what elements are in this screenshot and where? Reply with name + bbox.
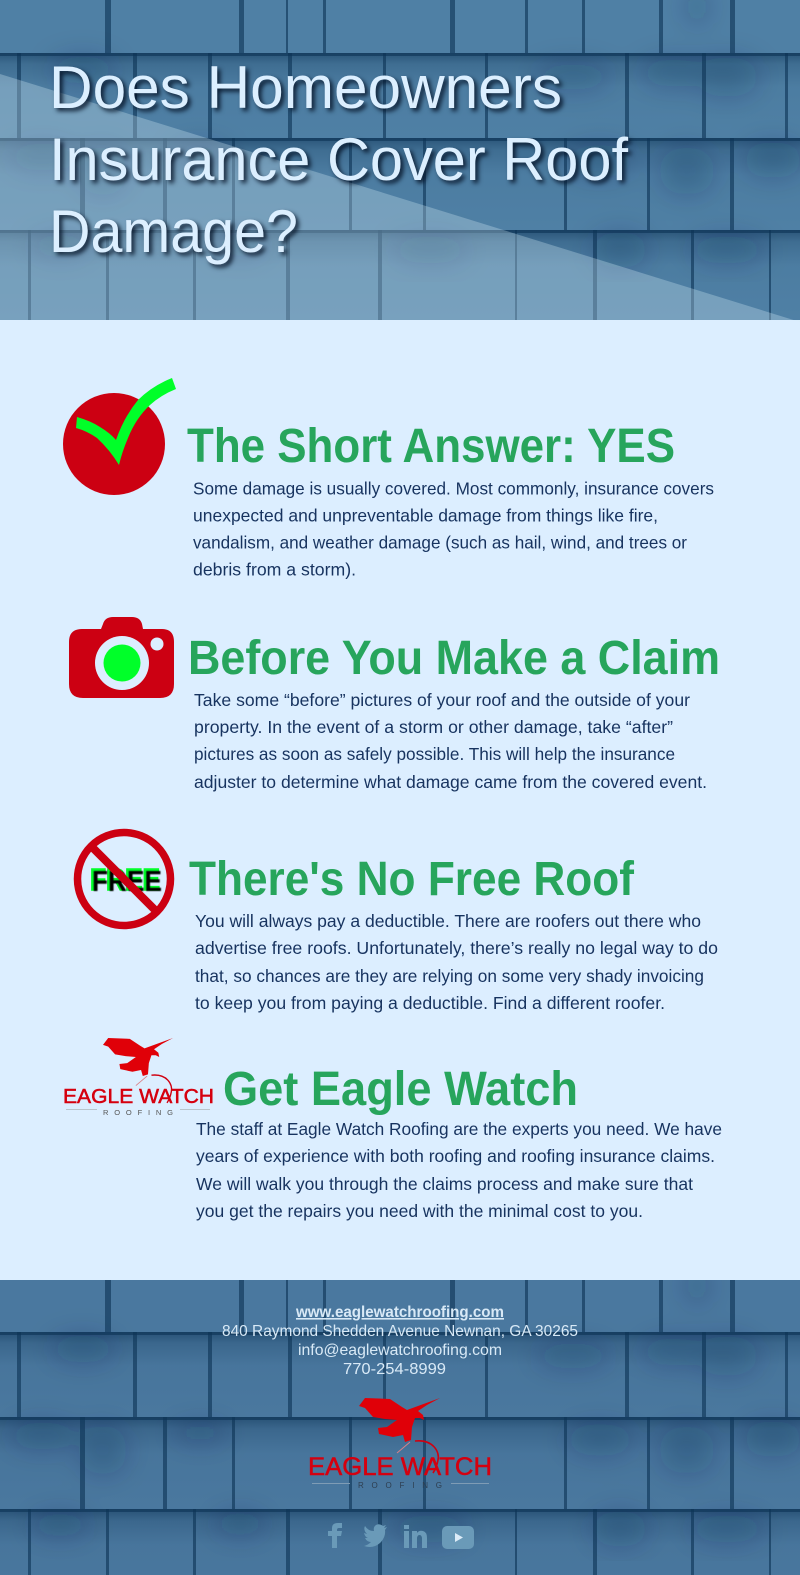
icon: linkedin xyxy=(404,1525,427,1548)
title: Damage? xyxy=(49,198,298,265)
body text: You will always pay a deductible. There are roofers out there who xyxy=(195,911,701,931)
title xyxy=(49,54,628,265)
icon: no free sign: FREE xyxy=(92,866,162,898)
contact details: 840 Raymond Shedden Avenue Newnan, GA 30265 xyxy=(222,1323,578,1340)
logo: eagle watch footer xyxy=(308,1398,492,1490)
icon: no free sign xyxy=(78,832,170,926)
body text: years of experience with both roofing and roofing insurance claims. xyxy=(196,1146,715,1166)
body text: Some damage is usually covered. Most commonly, insurance covers xyxy=(193,478,714,498)
logo: eagle watch footer: EAGLE WATCH xyxy=(308,1453,492,1481)
body text: to keep you from paying a deductible. Find a different roofer. xyxy=(195,993,665,1013)
heading: The Short Answer: YES xyxy=(187,420,675,473)
panel: content background xyxy=(0,320,800,1280)
section: no free roof xyxy=(78,832,718,1013)
heading: There's No Free Roof xyxy=(189,853,635,906)
section: the short answer xyxy=(63,378,714,580)
contact details xyxy=(222,1304,578,1378)
panel: hero header xyxy=(0,0,800,322)
icon: camera xyxy=(69,617,174,698)
contact details: 770-254-8999 xyxy=(343,1361,446,1378)
body text: vandalism, and weather damage (such as hail, wind, and trees or xyxy=(193,532,687,552)
body text: that, so chances are they are relying on some very shady invoicing xyxy=(195,966,704,986)
logo: eagle watch footer: ROOFING xyxy=(358,1481,442,1490)
body text xyxy=(193,478,714,580)
body text: you get the repairs you need with the minimal cost to you. xyxy=(196,1201,643,1221)
logo: eagle watch small: ROOFING xyxy=(103,1108,173,1117)
icon: youtube xyxy=(442,1526,474,1549)
title: Insurance Cover Roof xyxy=(49,126,628,193)
contact details: info@eaglewatchroofing.com xyxy=(298,1342,502,1359)
icon: twitter xyxy=(364,1524,387,1547)
title: Does Homeowners xyxy=(49,54,562,121)
body text: property. In the event of a storm or other damage, take “after” xyxy=(194,717,673,737)
icon: check mark on red circle xyxy=(63,378,176,495)
section: before you make a claim xyxy=(69,617,720,792)
contact details: www.eaglewatchroofing.com xyxy=(295,1304,504,1321)
body text: The staff at Eagle Watch Roofing are the experts you need. We have xyxy=(196,1119,722,1139)
icon: no free sign: FREE xyxy=(90,862,160,897)
heading: Before You Make a Claim xyxy=(188,632,720,685)
body text: debris from a storm). xyxy=(193,560,356,580)
heading: Get Eagle Watch xyxy=(223,1063,578,1116)
body text: unexpected and unpreventable damage from things like fire, xyxy=(193,506,658,526)
body text xyxy=(194,690,707,792)
body text: pictures as soon as safely possible. This will help the insurance xyxy=(194,744,675,764)
icon: facebook xyxy=(328,1523,342,1548)
logo: eagle watch small: EAGLE WATCH xyxy=(63,1086,214,1108)
body text xyxy=(196,1119,722,1221)
body text: advertise free roofs. Unfortunately, there’s really no legal way to do xyxy=(195,938,718,958)
social icons xyxy=(328,1523,474,1549)
panel: footer xyxy=(0,1268,800,1575)
logo: eagle watch small xyxy=(63,1038,214,1117)
body text: adjuster to determine what damage came from the covered event. xyxy=(194,772,707,792)
body text: Take some “before” pictures of your roof and the outside of your xyxy=(194,690,690,710)
section: get eagle watch xyxy=(63,1038,722,1221)
body text: We will walk you through the claims process and make sure that xyxy=(196,1174,693,1194)
body text xyxy=(195,911,718,1013)
